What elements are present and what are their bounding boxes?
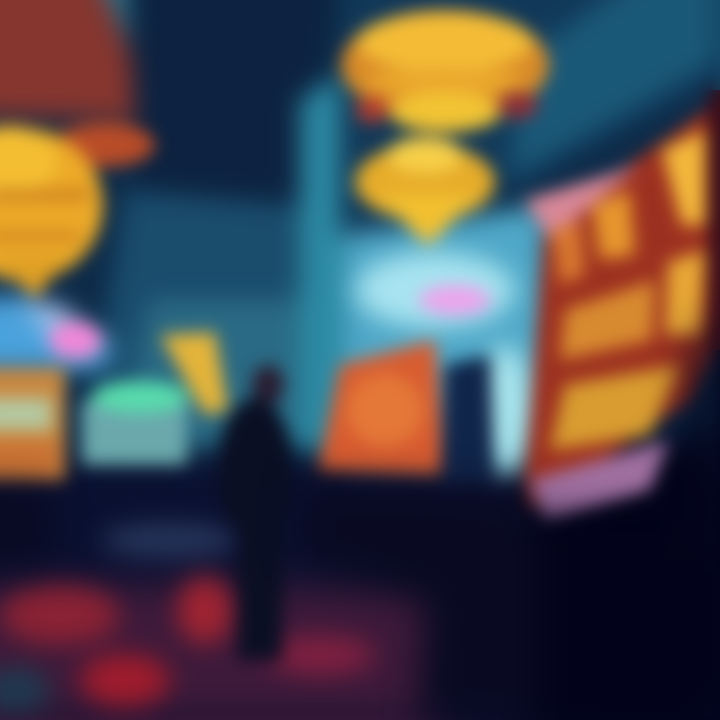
ceiling and walls bbox=[0, 0, 720, 480]
pink neon sign bbox=[419, 285, 491, 315]
icon: left chandelier bbox=[0, 123, 155, 298]
slot machine: far left bbox=[0, 322, 101, 480]
silhouette: foreground chairs bbox=[0, 320, 720, 720]
slot machine: green and yellow bbox=[82, 332, 228, 465]
silhouette: person bbox=[217, 365, 293, 660]
carpet red patches bbox=[0, 522, 375, 712]
dark figure: doorway bbox=[440, 355, 495, 485]
lower dark floor bbox=[0, 440, 720, 720]
icon: right chandelier bbox=[341, 10, 549, 245]
slot machine: orange centre bbox=[318, 340, 445, 475]
slot machines: right bank bbox=[525, 90, 720, 520]
light glow bbox=[0, 252, 533, 475]
